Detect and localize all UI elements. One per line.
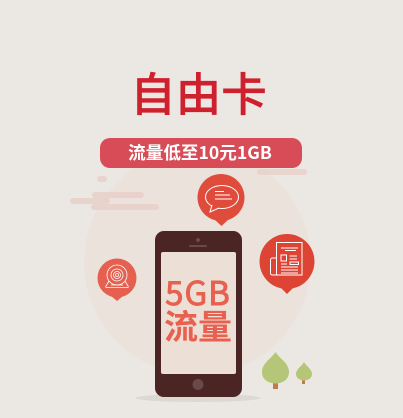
phone shadow	[136, 394, 260, 402]
background circle	[84, 148, 311, 376]
icon: chat bubble	[198, 174, 244, 226]
screen label: 流量	[164, 300, 232, 349]
screen text: 5GB	[165, 267, 231, 315]
large tree	[262, 352, 289, 389]
clouds	[70, 169, 307, 210]
subtitle pill: 流量低至10元1GB	[128, 140, 272, 165]
icon: newspaper bubble	[260, 234, 314, 294]
subtitle pill	[100, 138, 302, 168]
icon: webcam bubble	[98, 258, 136, 301]
title: 自由卡	[131, 58, 267, 124]
small tree	[296, 362, 312, 384]
phone	[155, 231, 242, 397]
